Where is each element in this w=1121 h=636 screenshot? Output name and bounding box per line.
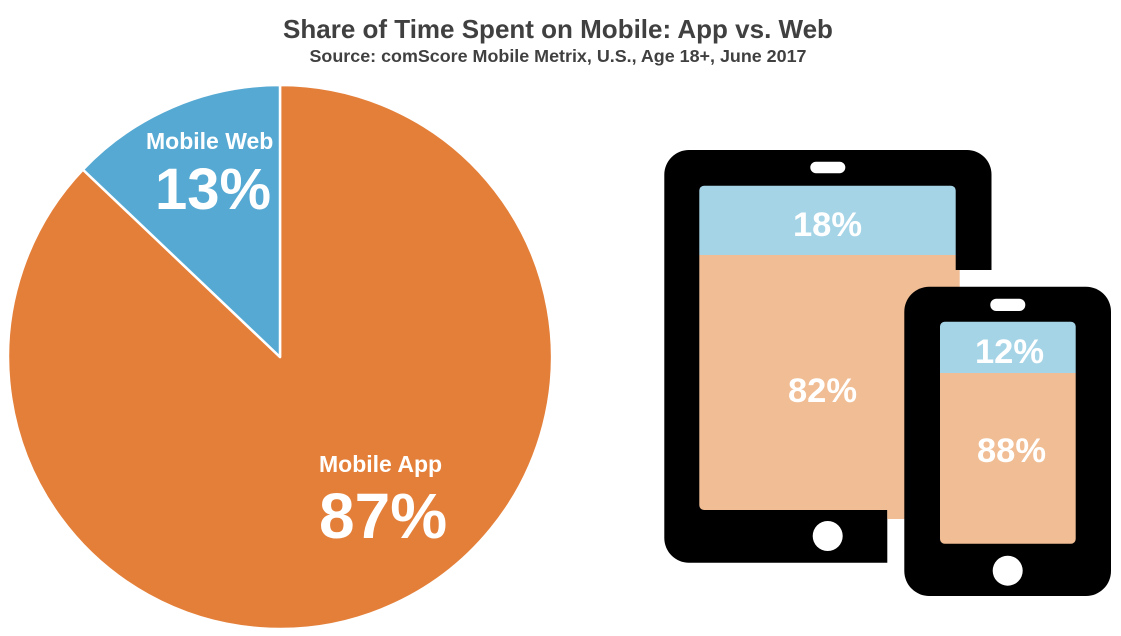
phone device	[904, 287, 1111, 596]
phone value: web 12%: 12%	[975, 333, 1044, 371]
pie chart: time share	[8, 85, 552, 629]
label: mobile app: Mobile App	[319, 451, 442, 477]
tablet value: web 18%: 18%	[793, 206, 862, 244]
title: Share of Time Spent on Mobile: App vs. Web	[283, 14, 833, 44]
value: mobile app 87%: 87%	[319, 480, 447, 552]
pie slice: mobile app	[8, 85, 552, 629]
phone speaker	[990, 299, 1025, 311]
tablet value: app 82%: 82%	[788, 372, 857, 410]
tablet home button	[813, 521, 843, 551]
phone value: app 88%: 88%	[977, 432, 1046, 470]
tablet screen: web share	[699, 186, 956, 255]
tablet speaker	[810, 162, 845, 173]
label: mobile web: Mobile Web	[146, 128, 273, 154]
tablet device	[664, 150, 992, 563]
subtitle: source: Source: comScore Mobile Metrix, U.S., Age 18+, June 2017	[310, 46, 807, 66]
phone home button	[993, 556, 1023, 586]
phone screen: web share	[940, 322, 1076, 373]
phone body	[904, 287, 1111, 596]
phone screen: app share	[940, 373, 1076, 544]
tablet screen: app share	[699, 255, 960, 519]
pie slice: mobile web	[83, 85, 280, 357]
tablet body	[664, 150, 992, 563]
value: mobile web 13%: 13%	[155, 157, 271, 222]
